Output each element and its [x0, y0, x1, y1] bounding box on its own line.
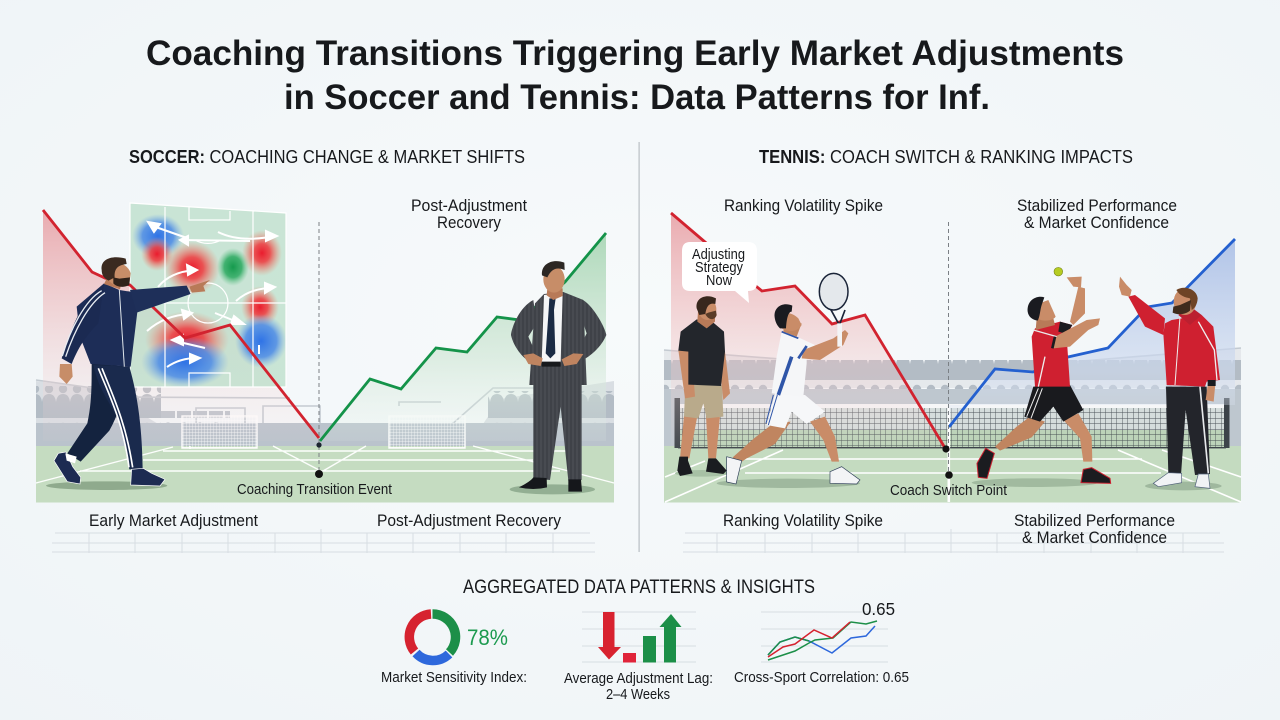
correlation value: 0.65 — [862, 599, 895, 619]
soccer stadium scene — [36, 380, 614, 502]
tennis chart labels: Stabilized Performance — [1017, 197, 1177, 215]
speech bubble: Adjusting — [692, 247, 745, 263]
soccer chart labels: Coaching Transition Event — [237, 481, 393, 498]
tennis player in white — [717, 273, 860, 488]
green recovery line — [320, 233, 606, 441]
lag label: 2–4 Weeks — [606, 686, 670, 703]
title: Coaching Transitions Triggering Early Market Adjustments — [146, 34, 1124, 73]
soccer chart labels: Post-Adjustment Recovery — [377, 511, 561, 530]
tennis player in red serving — [972, 267, 1111, 487]
tennis chart labels: Ranking Volatility Spike — [724, 197, 883, 215]
coach in black polo — [675, 296, 730, 477]
soccer goals — [182, 416, 465, 448]
insights heading: AGGREGATED DATA PATTERNS & INSIGHTS — [463, 576, 815, 598]
bar and arrow chart: adjustment lag — [582, 612, 696, 662]
soccer chart labels: Recovery — [437, 214, 502, 232]
red market drop line — [43, 210, 319, 438]
title — [146, 34, 1124, 117]
tennis court scene — [664, 348, 1241, 502]
coach in navy tracksuit — [46, 257, 210, 490]
correlation label: Cross-Sport Correlation: 0.65 — [734, 669, 909, 686]
panel: tennis — [664, 146, 1241, 553]
tennis chart labels: & Market Confidence — [1022, 528, 1167, 547]
green recovery area — [320, 233, 606, 441]
donut chart: market sensitivity — [409, 614, 456, 660]
soccer table grid — [52, 529, 595, 553]
speech bubble: Now — [706, 273, 732, 289]
title: in Soccer and Tennis: Data Patterns for Inf. — [284, 78, 990, 117]
tennis chart labels: Ranking Volatility Spike — [723, 511, 883, 530]
blue performance line — [949, 239, 1235, 427]
soccer chart labels: Post-Adjustment — [411, 197, 527, 215]
red volatility area — [671, 213, 945, 448]
soccer chart labels — [89, 197, 561, 530]
tennis chart labels: & Market Confidence — [1024, 214, 1169, 232]
tennis chart labels: Coach Switch Point — [890, 482, 1008, 499]
soccer heading: SOCCER: COACHING CHANGE & MARKET SHIFTS — [129, 146, 525, 167]
lag label — [564, 670, 713, 703]
panel: aggregated insights — [381, 576, 909, 703]
tennis net — [674, 398, 1230, 448]
tennis chart labels — [723, 197, 1177, 547]
transition marker — [315, 222, 323, 478]
speech bubble: Strategy — [695, 260, 744, 276]
panel: soccer — [36, 146, 614, 553]
coach in red jacket — [1119, 277, 1222, 490]
speech bubble — [682, 242, 757, 303]
sensitivity label: Market Sensitivity Index: — [381, 669, 527, 686]
red decline area — [43, 210, 319, 441]
sensitivity value: 78% — [467, 625, 508, 650]
switch marker — [942, 222, 953, 479]
divider between sports — [638, 142, 640, 552]
line chart: cross-sport correlation — [761, 612, 888, 662]
red ranking line — [671, 213, 945, 448]
tactical heatmap board — [130, 203, 287, 388]
tennis heading: TENNIS: COACH SWITCH & RANKING IMPACTS — [759, 146, 1133, 167]
lag label: Average Adjustment Lag: — [564, 670, 713, 687]
tennis chart labels: Stabilized Performance — [1014, 511, 1175, 530]
executive in pinstripe suit — [510, 261, 606, 494]
blue confidence area — [949, 239, 1235, 427]
tennis table grid — [683, 529, 1224, 553]
soccer chart labels: Early Market Adjustment — [89, 511, 258, 530]
